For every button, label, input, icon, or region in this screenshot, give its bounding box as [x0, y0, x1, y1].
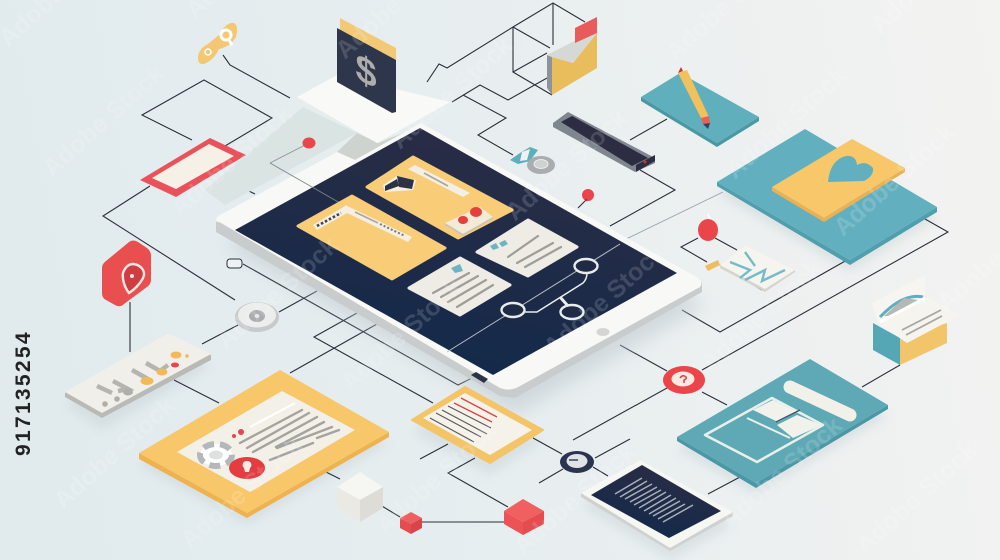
stock watermark text: Adobe Stock — [538, 238, 671, 361]
stock watermark text: Adobe Stock — [211, 231, 344, 354]
grey bar chart card — [65, 333, 211, 418]
stock watermark text: Adobe Stock — [165, 99, 298, 222]
box folder icon — [872, 275, 960, 365]
large yellow panel — [139, 370, 389, 518]
stock watermark text: Adobe Stock — [335, 273, 468, 396]
teal pencil card — [641, 67, 759, 147]
lower document card — [409, 258, 510, 315]
stock watermark text: Adobe Stock — [37, 59, 170, 182]
red frame card — [140, 138, 246, 197]
stock watermark text: Adobe Stock — [828, 118, 961, 241]
wallet card with dollar — [297, 18, 450, 143]
stock watermark text: Adobe Stock — [500, 103, 633, 226]
small white pill — [227, 259, 242, 268]
grey shade between plate and tablet — [337, 126, 420, 160]
soft panel shadows — [65, 141, 937, 560]
white cube — [337, 472, 383, 522]
top yellow card — [367, 157, 512, 238]
soft tablet shadow — [225, 140, 705, 415]
large red cube — [504, 499, 544, 535]
stock watermark text: Adobe Stock — [385, 31, 518, 154]
central yellow note — [412, 387, 543, 463]
search pin icon — [198, 23, 237, 64]
screen flow nodes — [447, 244, 620, 352]
right document card — [477, 220, 577, 276]
wallet card with dollar: $ — [355, 44, 377, 98]
connector lines network — [103, 3, 948, 522]
tablet dark screen — [235, 128, 677, 375]
stock watermark text: Adobe Stock — [715, 411, 848, 534]
red pin — [582, 189, 594, 201]
red cylinder — [698, 214, 718, 241]
red dot left — [302, 138, 316, 148]
left yellow card — [298, 196, 445, 279]
bezel mark line — [270, 143, 309, 163]
dark phone — [553, 112, 655, 172]
teal document panel — [677, 359, 888, 488]
tablet white surface — [216, 123, 701, 390]
charging port — [471, 372, 488, 383]
tablet side edge — [216, 222, 702, 398]
stock watermark text: Adobe Stock — [695, 254, 828, 377]
teal heart panel — [717, 129, 937, 265]
teal chip and grey coin — [510, 147, 555, 174]
stock watermark text: Adobe Stock — [508, 437, 641, 560]
stock watermark text: Adobe Stock — [48, 391, 181, 514]
dark ring node — [560, 451, 594, 473]
stock watermark text: Adobe Stock — [850, 436, 983, 559]
bezel link line — [270, 163, 340, 203]
red shield pin — [102, 240, 151, 306]
small chart card — [705, 245, 795, 292]
stock watermark text: Adobe Stock — [175, 431, 308, 554]
tablet device — [216, 123, 702, 398]
small red cube — [400, 512, 422, 534]
stock id vertical text: 917135254 — [12, 330, 35, 456]
stock watermark text: Adobe Stock — [370, 416, 503, 539]
red alert badge — [663, 366, 705, 394]
stock watermark text: Adobe Stock — [720, 61, 853, 184]
circular grey node — [235, 302, 279, 332]
small dark tablet — [581, 460, 733, 551]
home button — [596, 328, 610, 336]
envelope — [547, 17, 597, 95]
plate shadow on background — [205, 107, 357, 205]
